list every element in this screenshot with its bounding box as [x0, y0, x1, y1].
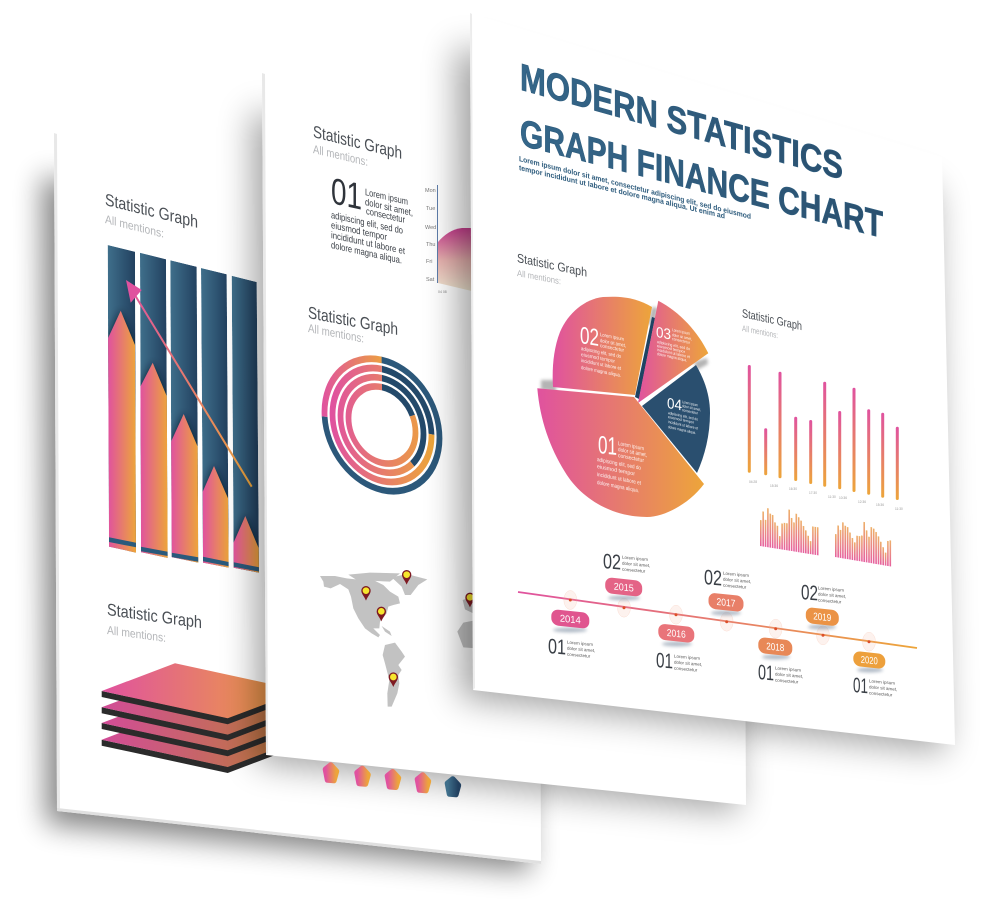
timeline 2014: dolor sit amet,: [567, 646, 595, 653]
slice 04: eiusmod tempor: [668, 415, 695, 425]
slice 01: adipiscing elit, sed do: [597, 457, 641, 472]
heading: statistic graph left 1: Statistic Graph: [105, 189, 198, 232]
timeline 2017: dolor sit amet,: [723, 577, 751, 584]
timeline 2014: 01: [548, 635, 566, 660]
slice 03: incididunt ut labore et: [657, 347, 691, 359]
timeline 2018: [758, 637, 803, 688]
chart: weekday area: [425, 185, 480, 294]
chart: stacked layers: [102, 663, 301, 773]
slice 01: dolor sit amet,: [618, 447, 647, 459]
chart: exploded pie: [537, 297, 710, 517]
ring third: [340, 369, 424, 481]
timeline 2015: consectetur: [622, 567, 646, 574]
timeline line: [518, 592, 917, 648]
slice 03: consectetur: [672, 336, 691, 345]
column 1: [108, 245, 136, 553]
layer 2: [102, 680, 301, 741]
chart: weekday area: Sat: [426, 277, 435, 283]
heading: statistic graph pie: Statistic Graph: [517, 251, 587, 280]
chart: concentric rings: [324, 347, 440, 503]
title line 2: GRAPH FINANCE CHART: [520, 112, 883, 247]
timeline 2020: 2020: [861, 655, 878, 668]
timeline 2016: dolor sit amet,: [674, 660, 702, 667]
slice 01: consectetur: [618, 453, 644, 464]
pin 1: [361, 586, 371, 601]
slice 01: [537, 388, 704, 517]
chart: small histogram 1: [760, 505, 818, 555]
slice 03: Lorem ipsum: [672, 327, 690, 336]
slice 02: consectetur: [600, 343, 624, 354]
column 3: [170, 260, 198, 563]
timeline 2020: Lorem ipsum: [869, 678, 895, 686]
heading: statistic graph middle 1: Statistic Graph: [313, 121, 402, 163]
timeline 2019: consectetur: [818, 597, 842, 605]
timeline 2016: Lorem ipsum: [674, 654, 700, 661]
subheading: all mentions middle 2: All mentions:: [308, 321, 364, 346]
text block: 01 lorem: consectetur: [366, 206, 406, 226]
title line 1: MODERN STATISTICS: [520, 56, 843, 188]
layer 4: [102, 712, 301, 773]
chart: vertical bars: [748, 365, 899, 500]
slice 03: [638, 301, 708, 403]
slice 01: 01: [598, 431, 617, 461]
slice 04: dolor sit amet,: [682, 404, 701, 412]
timeline 2014: Lorem ipsum: [567, 640, 593, 647]
page: left sheet: [54, 133, 541, 864]
chart: weekday area: Tue: [426, 206, 435, 212]
timeline 2015: 2015: [614, 582, 634, 595]
heading: statistic graph left 2: Statistic Graph: [107, 600, 202, 632]
text block: 01 lorem: dolor sit amet,: [365, 197, 413, 219]
timeline 2019: 02: [801, 581, 818, 605]
text block: 01 lorem: [331, 169, 413, 267]
ring inner: [348, 380, 416, 470]
timeline 2017: consectetur: [723, 583, 747, 590]
timeline 2020: consectetur: [869, 690, 893, 697]
pin 2: [402, 570, 411, 585]
intro line 1: Lorem ipsum dolor sit amet, consectetur adipiscing elit, sed do eiusmod: [519, 154, 751, 221]
ring outer: [324, 347, 440, 503]
text block: 01 lorem: Lorem ipsum: [365, 187, 408, 208]
arrow: diagonal trend: [126, 280, 252, 487]
bar labels: 16:30: [789, 487, 797, 491]
timeline 2018: 01: [758, 661, 774, 685]
slice 02: adipiscing elit, sed do: [581, 346, 621, 360]
slice 02: Lorem ipsum: [600, 332, 624, 343]
bar labels: 11:30: [895, 507, 903, 511]
slice 02: dolore magna aliqua.: [581, 365, 621, 379]
slice 01: Lorem ipsum: [618, 441, 644, 452]
page: front sheet: [470, 13, 955, 745]
intro line 2: tempor incididunt ut labore et dolore magna aliqua. Ut enim ad: [519, 163, 725, 221]
timeline 2014: [548, 609, 595, 662]
timeline 2018: Lorem ipsum: [775, 665, 801, 673]
slice 03: adipiscing elit, sed do: [657, 339, 691, 351]
chart: weekday area: Mon: [425, 188, 436, 194]
slice 03: dolor sit amet,: [672, 332, 692, 341]
subheading: all mentions bars: All mentions:: [742, 323, 778, 340]
sheet edge left: [54, 133, 60, 811]
timeline 2016: consectetur: [674, 666, 698, 673]
chart: weekday area: Thu: [426, 242, 435, 248]
timeline 2017: 2017: [716, 597, 736, 610]
timeline 2017: [704, 566, 751, 616]
bar labels: 15:36: [876, 503, 884, 507]
layer 3: [102, 695, 301, 756]
text block: 01 lorem: adipiscing elit, sed do: [331, 210, 403, 237]
timeline 2016: 2016: [667, 628, 686, 641]
timeline 2019: Lorem ipsum: [818, 585, 844, 593]
timeline 2018: consectetur: [775, 677, 799, 685]
timeline 2014: consectetur: [567, 652, 591, 659]
slice 02: [553, 297, 652, 395]
timeline 2015: Lorem ipsum: [622, 555, 648, 562]
text block: 01 lorem: dolore magna aliqua.: [331, 240, 402, 267]
subheading: all mentions left 1: All mentions:: [105, 212, 164, 241]
slice 02: dolor sit amet,: [600, 338, 626, 349]
bar labels: 12:36: [858, 500, 866, 504]
timeline 2015: dolor sit amet,: [622, 561, 650, 568]
timeline 2016: [656, 623, 702, 676]
column 2: [140, 253, 168, 558]
slice 02: eiusmod tempor: [581, 352, 615, 365]
shadow: middle page: [252, 110, 738, 812]
pin 3: [377, 607, 386, 621]
bar labels: 04:28: [749, 480, 757, 484]
timeline 2019: dolor sit amet,: [818, 591, 846, 599]
timeline markers: [564, 590, 876, 651]
slice 01: incididunt ut labore et: [597, 472, 641, 487]
number 01: 01: [331, 169, 362, 218]
heading: statistic graph bars: Statistic Graph: [742, 306, 802, 333]
pin 4: [389, 672, 398, 687]
slice 04: consectetur: [682, 408, 699, 416]
page: middle sheet: [262, 73, 746, 805]
bar labels: 10:36: [839, 496, 847, 500]
ring second: [332, 358, 432, 492]
pin 5: [465, 593, 475, 607]
shadow: front page: [456, 45, 945, 752]
bar labels: [749, 480, 903, 511]
slice 04: [642, 365, 710, 473]
text block: 01 lorem: incididunt ut labore et: [331, 230, 405, 257]
column 5: [232, 276, 259, 580]
timeline 2017: Lorem ipsum: [723, 571, 749, 578]
subheading: all mentions left 2: All mentions:: [107, 623, 166, 645]
slice 04: incididunt ut labore et: [668, 420, 699, 431]
text block: 01 lorem: eiusmod tempor: [331, 220, 388, 243]
slice 04: 04: [667, 395, 682, 414]
chart: weekday area: 04 08: [438, 290, 447, 294]
timeline 2020: [853, 651, 897, 701]
column 4: [201, 268, 229, 568]
chart: weekday area: Wed: [425, 225, 436, 231]
layer 1: [102, 663, 301, 724]
bar labels: 17:30: [809, 491, 817, 495]
timeline 2017: 02: [704, 566, 722, 591]
chart: weekday area: Fri: [426, 259, 432, 265]
subheading: all mentions pie: All mentions:: [517, 268, 561, 286]
chart: five column peaks: [108, 245, 259, 580]
sheet edge left: [470, 13, 475, 690]
timeline 2016: 01: [656, 649, 673, 673]
slice 02: incididunt ut labore et: [581, 358, 621, 372]
shadow: left page: [42, 175, 530, 872]
bar labels: 15:36: [770, 484, 778, 488]
timeline 2019: 2019: [813, 611, 832, 624]
navy gap strip: [635, 317, 655, 399]
subheading: all mentions middle 1: All mentions:: [313, 142, 368, 169]
slice 03: 03: [656, 324, 671, 343]
sheet edge left: [262, 73, 268, 755]
slice 04: adipiscing elit, sed do: [668, 411, 698, 422]
chart: small histogram 2: [835, 517, 891, 567]
timeline 2019: [801, 581, 846, 630]
map: world with pins: [320, 570, 477, 707]
timeline 2015: [603, 550, 650, 600]
heading: statistic graph middle 2: Statistic Graph: [308, 302, 398, 339]
timeline 2018: dolor sit amet,: [775, 671, 803, 679]
slice 03: eiusmod tempor: [657, 343, 686, 354]
sheet edge bottom: [57, 808, 541, 864]
bar labels: 11:30: [828, 495, 836, 499]
icons: pentagon row: [326, 765, 458, 794]
timeline 2020: dolor sit amet,: [869, 684, 897, 692]
slice 04: dolore magna aliqua.: [668, 425, 696, 435]
pie shadows: [541, 307, 708, 392]
timeline 2020: 01: [853, 674, 868, 698]
timeline 2015: 02: [603, 550, 621, 575]
slice 01: eiusmod tempor: [597, 464, 635, 478]
slice 04: Lorem ipsum: [682, 400, 698, 408]
slice 01: dolore magna aliqua.: [597, 480, 639, 494]
timeline 2014: 2014: [560, 614, 581, 627]
timeline 2018: 2018: [766, 641, 785, 654]
slice 03: dolore magna aliqua.: [657, 351, 687, 363]
slice 02: 02: [580, 322, 599, 352]
